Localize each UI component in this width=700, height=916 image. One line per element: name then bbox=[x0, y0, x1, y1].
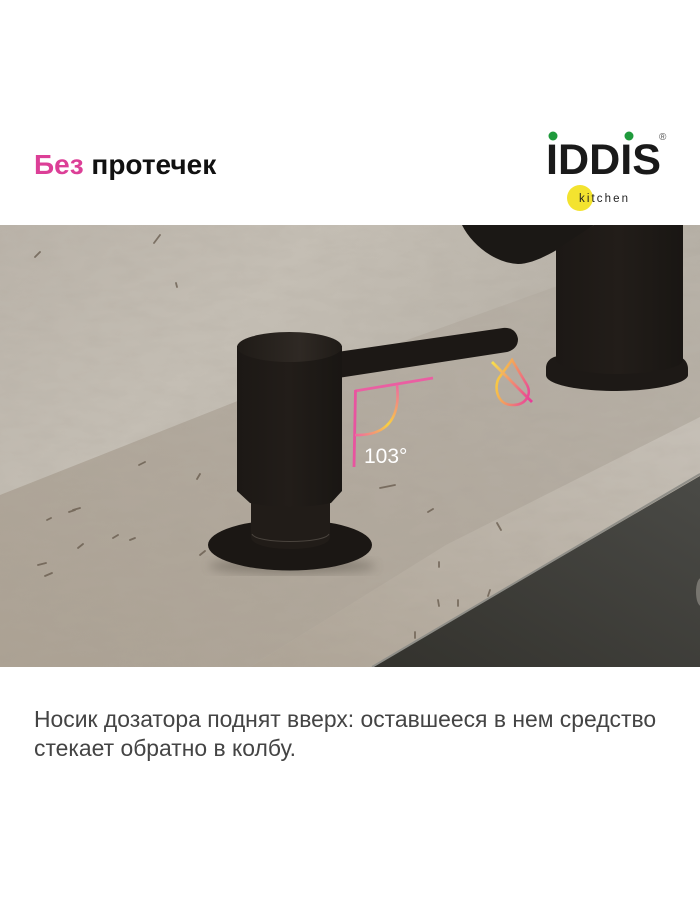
dispenser neck bbox=[251, 495, 330, 549]
sink drain detail bbox=[696, 578, 700, 606]
logo green dot left bbox=[548, 132, 558, 140]
label: 103 degrees: 103° bbox=[364, 445, 407, 468]
dispenser body bbox=[237, 346, 342, 507]
dispenser cap bbox=[237, 332, 342, 362]
counter top surface bbox=[0, 255, 700, 667]
neck ring bbox=[252, 534, 329, 542]
dispenser contact shadow bbox=[208, 558, 376, 574]
faucet column bbox=[556, 225, 683, 374]
wall surface bbox=[0, 225, 700, 667]
title: Без протечек bbox=[34, 149, 216, 180]
dispenser bbox=[208, 328, 518, 570]
body text bbox=[34, 706, 656, 761]
logo: iddis kitchen bbox=[546, 132, 667, 211]
angle vertical line bbox=[354, 390, 356, 467]
drop outline bbox=[497, 360, 529, 405]
drop slash bbox=[492, 362, 532, 402]
icon: 103 degree angle bbox=[354, 378, 433, 467]
logo yellow circle bbox=[567, 185, 593, 211]
body text: стекает обратно в колбу. bbox=[34, 735, 296, 761]
angle arc bbox=[355, 385, 398, 435]
sink bbox=[372, 476, 700, 667]
dispenser spout bbox=[337, 328, 518, 378]
logo green dot right bbox=[624, 132, 634, 140]
logo kitchen text: kitchen bbox=[579, 193, 630, 205]
sink rim highlight bbox=[372, 474, 700, 667]
faucet base skirt bbox=[546, 356, 688, 391]
angle horizontal line bbox=[355, 378, 433, 391]
shelf front face bbox=[250, 417, 700, 667]
body text: Носик дозатора поднят вверх: оставшееся в нем средство bbox=[34, 706, 656, 732]
faucet spout bbox=[462, 225, 594, 264]
icon: crossed drop bbox=[492, 360, 532, 405]
stone texture bbox=[0, 225, 700, 667]
registered mark: ® bbox=[659, 132, 667, 143]
logo wordmark: IDDIS bbox=[546, 136, 661, 184]
dispenser base plate bbox=[208, 520, 372, 570]
panel: product photo bbox=[0, 225, 700, 667]
stone specks bbox=[35, 235, 501, 638]
